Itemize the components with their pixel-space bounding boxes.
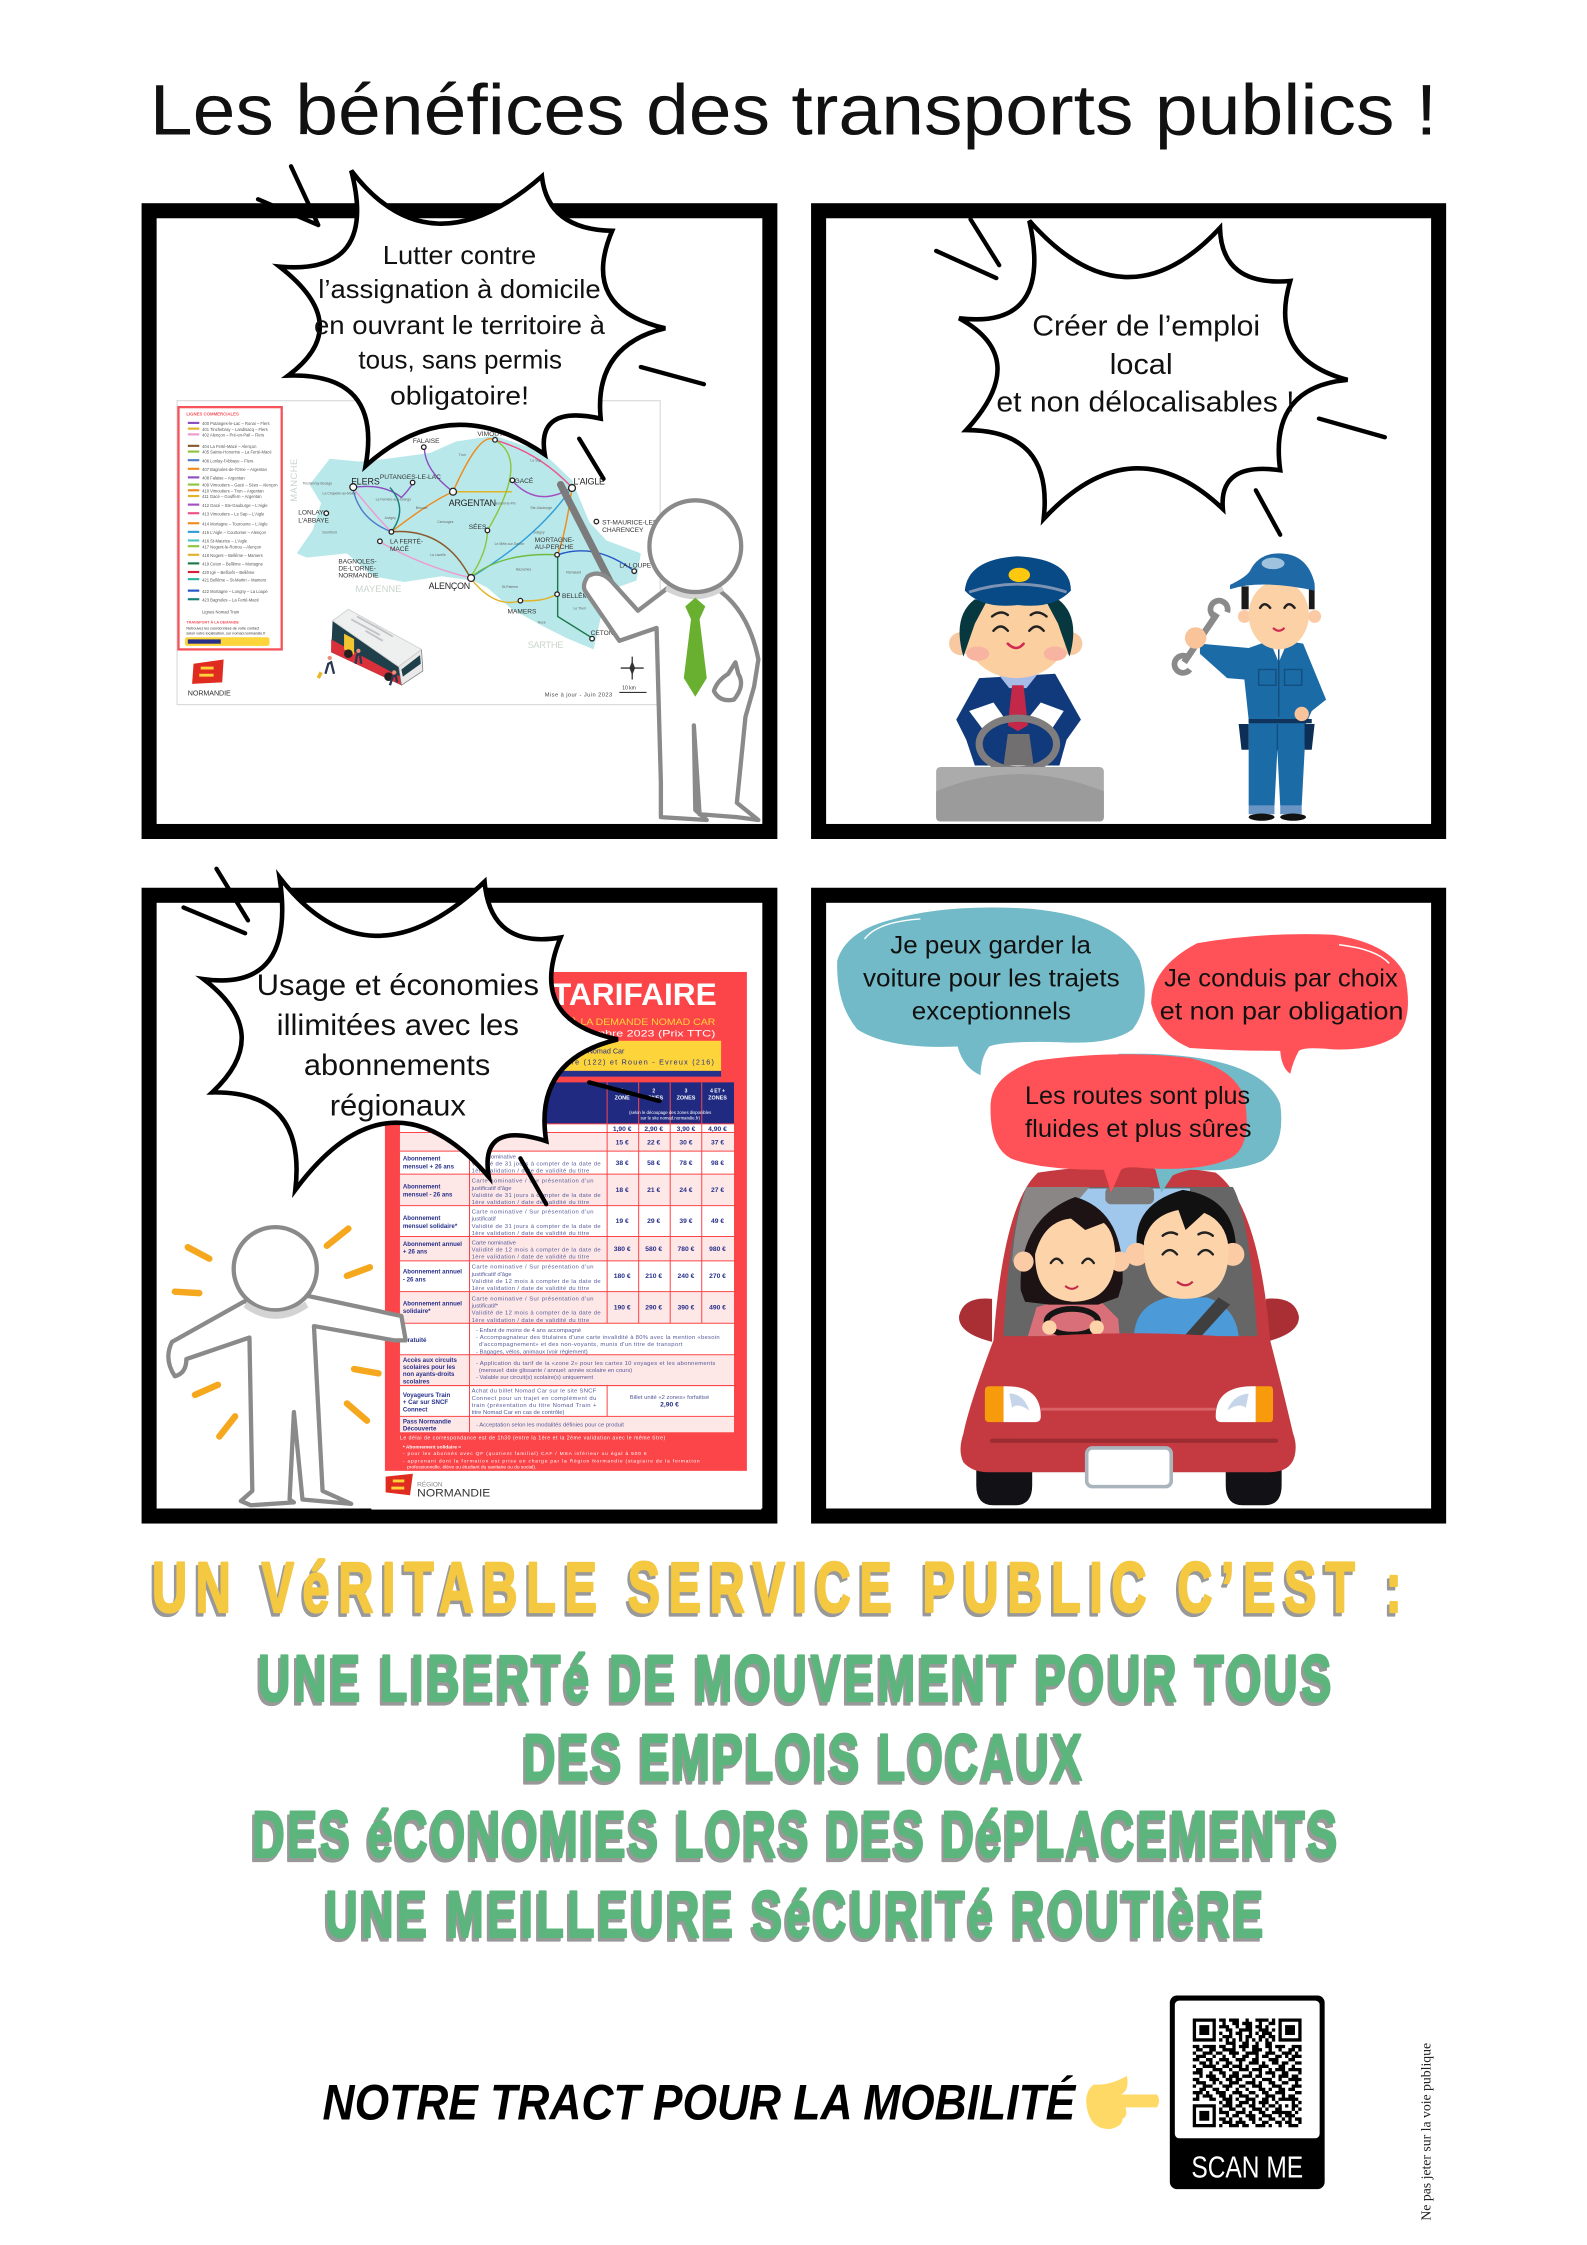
tarif sheet: 39 € [679,1218,693,1225]
map: Orne network [289,431,660,650]
map legend: 423 Bagnoles – La Ferté-Macé [202,597,260,602]
tarif sheet: 2,90 € [660,1401,679,1408]
map: Orne network: Soligny [533,530,545,534]
bus [318,609,423,685]
tarif sheet: Pass Normandie [403,1419,452,1426]
panel: lutter contre l'assignation à domicile [149,166,770,831]
map: Orne network: L'AIGLE [573,477,605,487]
tarif sheet: 27 € [711,1187,724,1194]
tarif sheet: 1ère validation / date de validité du titre [472,1255,589,1261]
map: Orne network: Le Theil [573,606,586,610]
tarif sheet: 22 € [647,1140,661,1147]
heading: un véritable service public: UN VéRITABLE SERVICE PUBLIC C’EST : [152,1548,1402,1627]
panel: voiture et bulles [819,895,1439,1516]
tract call to action: NOTRE TRACT POUR LA MOBILITÉ [323,2075,1077,2131]
map legend: 414 Mortagne – Tourouvre – L'Aigle [202,521,268,526]
tarif sheet: - 26 ans [403,1277,426,1284]
man passenger [1125,1190,1244,1336]
character: mechanic [1174,553,1326,821]
map: Orne network: ALENÇON [429,581,470,591]
tarif sheet: Validité de 12 mois à compter de la date de [472,1248,601,1254]
tarif sheet: professionnelle, élève ou étudiant du sanitaire ou du social). [407,1465,536,1471]
map: Orne network: Juvigny [384,516,396,520]
speech burst: local [1110,349,1173,381]
tarif sheet: Validité de 31 jours à compter de la date de [472,1162,601,1168]
attention ticks [175,1229,378,1436]
map legend: 411 Gacé – Gouffern – Argentan [202,494,262,499]
speech burst: Créer de l’emploi [1032,310,1260,342]
tarif sheet: non ayants-droits [403,1371,455,1378]
tarif sheet: 240 € [678,1273,695,1280]
tarif sheet: TARIFAIRE [552,976,717,1012]
tarif sheet: d'accompagnement» et des non-voyants, munis d'un titre de transport [479,1342,683,1348]
tarif sheet: - Accompagnateur des titulaires d'une carte invalidité à 80% avec la mention «besoin [476,1335,720,1341]
map legend: 413 Vimoutiers – Le Sap – L'Aigle [202,511,265,516]
compass and date [545,657,647,699]
map legend: Retrouvez les coordonnées de votre contact [186,626,259,630]
region logo [188,659,231,697]
map legend: 412 Gacé – Ste-Gauburge – L'Aigle [202,503,268,508]
tarif sheet: Carte nominative / Sur présentation d'un [472,1296,594,1302]
bubble: routes: Les routes sont plus [1025,1082,1250,1110]
tarif sheet: Abonnement annuel [403,1269,462,1276]
map: Orne network: L'ABBAYE [298,518,330,525]
tarif sheet: embre 2023 (Prix TTC) [588,1028,715,1038]
map legend: TRANSPORT À LA DEMANDE [186,620,239,625]
tarif sheet: 980 € [709,1246,726,1253]
map legend: 406 Lonlay-l'Abbaye – Flers [202,458,253,463]
tarif sheet: 4 ET + [710,1088,725,1094]
speech burst: l’assignation à domicile [318,276,601,304]
map: Orne network: Trun [459,453,466,457]
map legend: 404 La Ferté-Macé – Alençon [202,444,257,449]
tarif sheet: Abonnement [403,1155,440,1162]
map: Orne network: FLERS [351,477,380,487]
legal notice: Ne pas jeter sur la voie publique [1419,2043,1434,2221]
map: Orne network: MAYENNE [356,584,401,594]
map: Orne network: Tinchebray-Bocage [302,482,332,486]
map legend: 400 Putanges-le-Lac – Ronai – Flers [202,421,270,426]
map legend: 416 St-Maurice – L'Aigle [202,539,248,544]
bubble: conduire par choix [1151,934,1408,1074]
compass and date: 10 km [622,686,636,692]
map legend [178,407,282,649]
map: Orne network: FALAISE [413,438,440,445]
tarif sheet: scolaires pour les [403,1364,456,1371]
speech burst [936,219,1385,535]
tarif sheet: Validité de 31 jours à compter de la date de [472,1224,601,1230]
tarif sheet: - Enfant de moins de 4 ans accompagné [476,1328,581,1334]
map: Orne network: Nocé [538,621,546,625]
tarif sheet: Gratuité [403,1337,427,1344]
map legend: LIGNES COMMERCIALES [186,412,239,417]
map: Orne network: Ste-Gauburge [530,506,552,510]
tarif sheet: 24 € [679,1187,693,1194]
tarif sheet: 1ère validation / date de validité du titre [472,1286,589,1292]
benefit: économies: DES éCONOMIES LORS DES DéPLACEMENTS [250,1801,1335,1875]
tarif sheet: Le délai de correspondance est de 1h30 (entre la 1ère et la 2ème validation avec le même titre) [400,1435,665,1441]
speech burst: et non délocalisables ! [996,386,1295,418]
map legend: 410 Vimoutiers – Trun – Argentan [202,488,264,493]
tarif sheet: train (présentation du titre Nomad Train + [472,1403,597,1409]
tarif sheet: Connect pour un trajet en complément du [472,1396,596,1402]
tarif sheet: (selon le découpage des zones disponibles [629,1110,711,1115]
tarif sheet: 98 € [711,1160,724,1167]
character: bus driver [936,556,1104,821]
map: Orne network: MACÉ [390,544,410,553]
benefit: liberté de mouvement: UNE LIBERTé DE MOUVEMENT POUR TOUS [258,1641,1331,1715]
qr code [1170,1996,1325,2189]
compass and date: Mise à jour - Juin 2023 [545,693,612,699]
tarif sheet: Carte nominative / Sur présentation d'un [472,1179,594,1185]
title: Les bénéfices des transports publics ! [150,71,1437,151]
tarif sheet: justificatif [471,1217,496,1223]
map: Orne network: SARTHE [528,640,563,650]
map: Orne network: MAMERS [507,609,537,616]
region logo: NORMANDIE [188,689,231,697]
tarif sheet: 1ère validation / date de validité du titre [472,1200,589,1206]
map: Orne network: La Chapelle-au-Moine [323,492,356,496]
map: Orne network: La Ferrière-aux-Étangs [376,496,411,501]
region logo [386,1474,491,1500]
benefit: sécurité routière: UNE MEILLEURE SéCURITé ROUTIèRE [323,1881,1261,1954]
tarif sheet: 390 € [678,1305,695,1312]
tarif sheet: - pour les abonnés avec QF (quotient familial) CAF / MSA inférieur ou égal à 500 € [403,1451,647,1457]
tarif sheet: 49 € [711,1218,724,1225]
tarif sheet: 1ère validation / date de validité du titre [472,1318,589,1324]
benefit: liberté de mouvement: UNE LIBERTé DE MOUVEMENT POUR TOUS [256,1645,1329,1719]
panel: usage et économies [149,869,770,1516]
map: Orne network: PUTANGES-LE-LAC [380,474,441,481]
map: Orne network: Le Mêle-sur-Sarthe [495,542,524,546]
map legend: 409 Vimoutiers – Gacé – Sées – Alençon [202,483,278,488]
map: Orne network: DE-L'ORNE- [338,566,376,573]
speech burst: tous, sans permis [358,346,562,374]
map: Orne network: CETON [591,630,614,637]
tarif sheet: À LA DEMANDE NOMAD CAR [571,1017,716,1027]
tarif sheet: Carte nominative / Sur présentation d'un [472,1265,594,1271]
tarif sheet: (mensuel: date glissante / annuel: année scolaire en cours) [479,1368,632,1374]
tarif sheet: titre Nomad Car en cas de contrôle) [472,1410,565,1416]
bubble: garder la voiture [837,907,1145,1075]
map: Orne network: Nonant-le-Pin [495,502,516,506]
tarif sheet: 1,90 € [613,1126,632,1133]
map legend: 407 Bagnoles-de-l'Orne – Argentan [202,467,268,472]
speech burst: régionaux [330,1089,466,1122]
map: Orne network: La Lacelle [430,553,446,557]
map legend: 420 Igé – Belforêt – Bellême [202,570,255,575]
map: Orne network: Domfront [323,530,337,534]
bubble: conduire par choix: et non par obligation [1160,997,1403,1025]
tarif sheet: Validité de 12 mois à compter de la date de [472,1279,601,1285]
bubble: garder la voiture: voiture pour les trajets [863,964,1120,992]
map legend: 401 Tinchebray – Landisacq – Flers [202,427,268,432]
tarif sheet: - Valable sur circuit(s) scolaire(s) uniquement [476,1375,593,1381]
map: Orne network: BAGNOLES- [338,558,377,565]
tarif sheet: ZONES [708,1096,727,1102]
tarif sheet: sur le site nomad.normandie.fr) [640,1116,701,1121]
tarif sheet: ZONE [615,1096,630,1102]
speech burst [184,869,659,1204]
tarif sheet: Abonnement annuel [403,1300,462,1307]
tarif sheet: Abonnement [403,1183,440,1190]
map: Orne network: LONLAY- [298,510,325,517]
map: Orne network: NORMANDIE [338,573,379,580]
tarif sheet: Nomad Car [588,1048,625,1056]
bubble: routes: fluides et plus sûres [1025,1115,1252,1143]
heading: un véritable service public: UN VéRITABLE SERVICE PUBLIC C’EST : [150,1551,1399,1631]
speech burst: en ouvrant le territoire à [314,312,606,340]
speech burst: abonnements [304,1049,490,1082]
map legend: 408 Falaise – Argentan [202,476,245,481]
map: Orne network: CHARENCEY [602,527,644,534]
tarif sheet: 490 € [709,1305,726,1312]
map: Orne network: Briouze [416,506,427,510]
tarif sheet: 1ère validation / date de validité du titre [472,1169,589,1175]
map legend: 402 Alençon – Pré-en-Pail – Flers [202,433,264,438]
speech burst [258,166,704,479]
tarif sheet: Voyageurs Train [403,1392,451,1399]
region logo: NORMANDIE [417,1488,491,1500]
tarif sheet: 4,90 € [708,1126,727,1133]
speech burst: Usage et économies [257,969,539,1002]
map legend: 421 Bellême – St-Martin – Mamers [202,577,266,582]
tarif sheet: mensuel solidaire* [403,1223,458,1230]
tarif sheet: * Abonnement solidaire = [403,1445,461,1451]
tarif sheet: 3 [685,1088,688,1094]
tarif sheet: 18 € [616,1187,629,1194]
tarif sheet: + Car sur SNCF [403,1399,448,1406]
tarif sheet: 290 € [645,1305,662,1312]
tarif sheet: 15 € [616,1140,629,1147]
tarif sheet: 2 [652,1088,655,1094]
speech burst: Lutter contre [383,242,536,270]
map legend: selon votre localisation, sur nomad.normandie.fr [186,631,266,635]
tarif sheet: Accès aux circuits [403,1357,457,1364]
map legend: 419 Ceton – Bellême – Mortagne [202,562,264,567]
tarif sheet: 3,90 € [677,1126,696,1133]
tarif sheet: Abonnement [403,1215,440,1222]
tarif sheet: Billet unité «2 zones» forfaitisé [630,1395,709,1401]
tarif sheet: Carte nominative / Sur présentation d'un [472,1210,594,1216]
map legend: 415 L'Aigle – Courtomer – Alençon [202,530,267,535]
bubble: garder la voiture: Je peux garder la [890,931,1091,959]
tarif sheet: Découverte [403,1426,437,1433]
map: Orne network: MANCHE [289,459,299,502]
tarif sheet: - apprenant dont la formation est prise en charge par la Région Normandie (stagiaire de la formation [403,1458,700,1464]
map legend: 422 Mortagne – Longny – La Loupe [202,589,268,594]
bubble: garder la voiture: exceptionnels [912,997,1071,1025]
benefit: économies: DES éCONOMIES LORS DES DéPLACEMENTS [252,1798,1337,1871]
map legend: Lignes Nomad Train [202,610,240,615]
headlights [985,1386,1273,1422]
tarif sheet: 30 € [679,1140,693,1147]
tarif sheet: Validité de 12 mois à compter de la date de [472,1311,601,1317]
tarif sheet: + 26 ans [403,1249,428,1256]
map: Orne network: ST-MAURICE-LES- [602,520,660,527]
speech burst: obligatoire! [390,382,529,410]
map: Orne network: GACÉ [515,476,534,485]
tarif sheet: ZONES [677,1096,696,1102]
character: presenter with pointer [561,485,758,820]
tarif sheet: 58 € [647,1160,661,1167]
speech burst: illimitées avec les [277,1009,519,1042]
map: Orne network: St-Paterne [502,585,518,589]
tarif sheet: ZONES [644,1096,663,1102]
tarif sheet: 210 € [645,1273,662,1280]
tarif sheet: 1 [621,1088,624,1094]
benefit: emplois locaux: DES EMPLOIS LOCAUX [521,1724,1080,1797]
map: Orne network: Bazoches [516,568,531,572]
tarif sheet: Validité de 31 jours à compter de la date de [472,1193,601,1199]
map: Orne network: ARGENTAN [449,498,496,508]
tarif sheet: ère (122) et Rouen - Evreux (216) [566,1058,714,1066]
benefit: emplois locaux: DES EMPLOIS LOCAUX [523,1720,1082,1794]
tarif sheet: justificatif d'âge [471,1186,512,1192]
tarif sheet: 2,90 € [644,1126,663,1133]
map legend: 405 Sainte-Honorine – La Ferté-Macé [202,450,272,455]
car with two people [959,1166,1299,1505]
tarif sheet: 19 € [616,1218,629,1225]
character: presenting figure [168,1227,406,1505]
tarif sheet: Connect [403,1406,427,1413]
icon: pointing hand [1086,2076,1159,2129]
tarif sheet: mensuel + 26 ans [403,1163,455,1170]
region logo: RÉGION [417,1480,443,1489]
tarif sheet: 21 € [647,1187,661,1194]
bubble: routes [991,1054,1252,1193]
bubble: conduire par choix: Je conduis par choix [1164,964,1398,992]
woman driver [1014,1197,1130,1336]
tarif sheet: 38 € [616,1160,629,1167]
tarif sheet: 780 € [678,1246,695,1253]
map legend: 417 Nogent-le-Rotrou – Alençon [202,544,262,549]
tarif sheet: Abonnement annuel [403,1241,462,1248]
map: Orne network: Carrouges [437,520,454,524]
tarif sheet: - Acceptation selon les modalités définies pour ce produit [476,1422,624,1428]
benefit: sécurité routière: UNE MEILLEURE SéCURITé ROUTIèRE [325,1877,1263,1951]
map: Orne network: BELLÊME [562,591,593,600]
bubble: blue back [1118,1054,1281,1193]
tarif sheet [371,946,761,1510]
tarif sheet: 380 € [614,1246,631,1253]
tarif sheet: - Bagages, vélos, animaux (voir règlement) [476,1349,588,1355]
map: Orne network: VIMOUTIERS [477,431,519,438]
tarif sheet: Carte nominative [472,1240,516,1246]
tarif sheet: 37 € [711,1140,724,1147]
tarif sheet: 190 € [614,1305,631,1312]
tarif sheet: justificatif* [471,1303,499,1309]
tarif sheet: 580 € [645,1246,662,1253]
map legend: 418 Nogent – Bellême – Mamers [202,553,263,558]
map: Orne network: Rémalard [566,570,581,574]
network map sheet [177,401,660,705]
map: Orne network: MORTAGNE- [535,537,574,544]
tarif sheet: justificatif d'âge [471,1272,512,1278]
tarif sheet: 180 € [614,1273,631,1280]
tarif sheet: 29 € [647,1218,661,1225]
qr code: SCAN ME [1191,2152,1303,2185]
tarif sheet: 78 € [679,1160,693,1167]
map: Orne network: AU-PERCHE [535,544,574,551]
tarif sheet: mensuel - 26 ans [403,1191,453,1198]
tarif sheet: 270 € [709,1273,726,1280]
map: Orne network: Le Sap [530,459,541,463]
tarif sheet: solidaire* [403,1308,431,1315]
map: Orne network: SÉES [469,522,487,531]
tarif sheet: - Application du tarif de la «zone 2» pour les cartes 10 voyages et les abonnements [476,1361,715,1367]
panel: créer de l'emploi local [819,211,1439,831]
map: Orne network: LA FERTÉ- [390,536,423,545]
tarif sheet: 1ère validation / date de validité du titre [472,1231,589,1237]
tarif sheet: Achat du billet Nomad Car sur le site SNCF [472,1389,597,1395]
tarif sheet: Carte nominative [472,1154,516,1160]
tarif sheet: scolaires [403,1378,430,1385]
map: Orne network: LA LOUPE [619,563,652,570]
